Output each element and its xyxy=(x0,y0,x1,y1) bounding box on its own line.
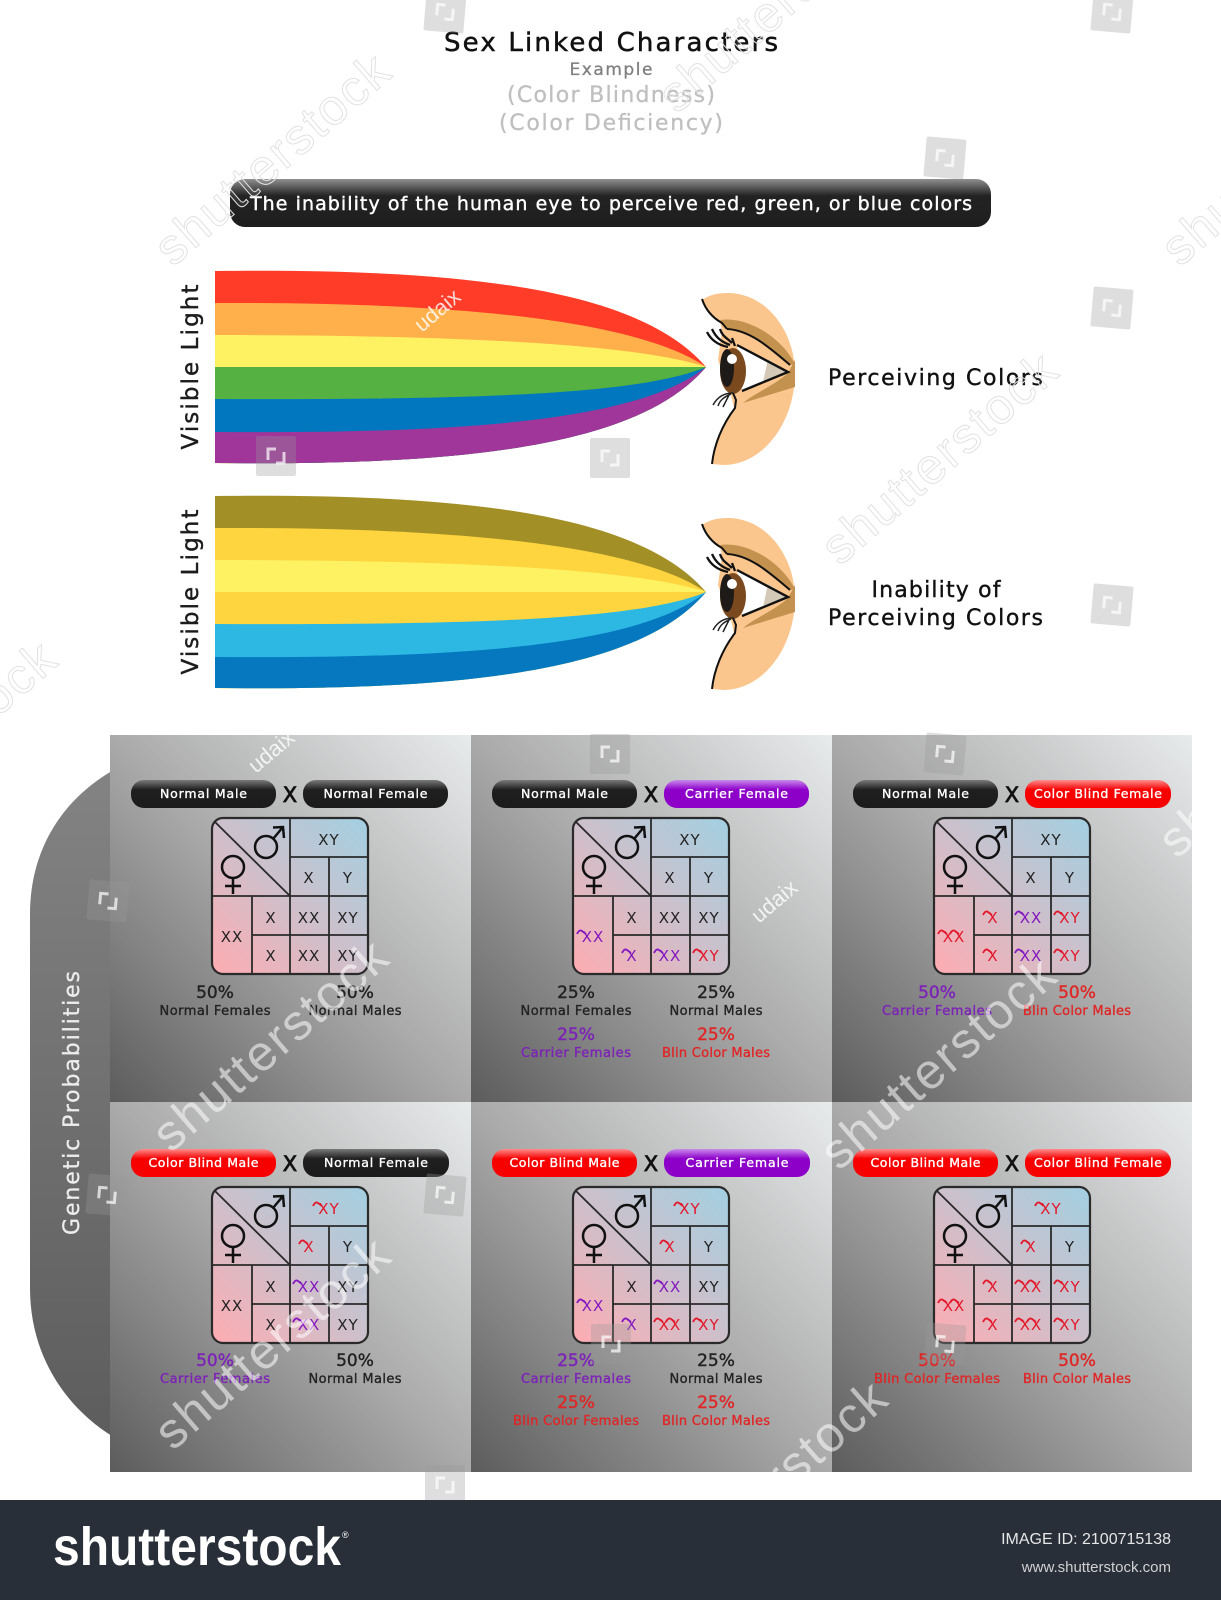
probabilities: Blin Color Males xyxy=(1023,1004,1131,1019)
punnett square: XX xyxy=(298,947,320,965)
parents pills: X xyxy=(283,1152,297,1176)
label: inability of perceiving colors: Inability of xyxy=(872,578,1002,603)
parents pills xyxy=(492,1149,810,1177)
punnett square: XY xyxy=(698,947,720,965)
punnett square: XX xyxy=(659,1278,681,1296)
watermark overlay: shutterstock xyxy=(809,946,1067,1180)
probabilities xyxy=(882,983,1131,1019)
title: Sex Linked Characters xyxy=(444,28,778,58)
punnett square: X xyxy=(987,1316,999,1334)
punnett square: XX xyxy=(1020,1278,1042,1296)
probabilities: 50% xyxy=(196,983,234,1003)
punnett square: XY xyxy=(1040,831,1062,849)
punnett square: XX xyxy=(1020,909,1042,927)
panel: color blind male x normal female xyxy=(110,1102,471,1472)
punnett square: X xyxy=(265,1316,277,1334)
side bracket: genetic probabilities xyxy=(30,771,112,1436)
parents pills xyxy=(131,780,448,808)
punnett square: XY xyxy=(337,1316,359,1334)
probabilities: Normal Males xyxy=(308,1372,402,1387)
parents pills: Color Blind Male xyxy=(870,1155,981,1170)
side bracket: genetic probabilities: Genetic Probabilities xyxy=(60,971,85,1235)
probabilities xyxy=(520,983,770,1061)
image id: IMAGE ID: 2100715138 xyxy=(1001,1531,1171,1548)
punnett square: XX xyxy=(659,1316,681,1334)
probabilities: 50% xyxy=(918,1351,956,1371)
icon: eye unable to perceive colors xyxy=(702,518,795,690)
parents pills: Normal Female xyxy=(324,786,428,801)
probabilities: Blin Color Males xyxy=(662,1414,770,1429)
punnett square: XX xyxy=(582,1297,604,1315)
probabilities: Blin Color Females xyxy=(513,1414,639,1429)
punnett square: X xyxy=(987,947,999,965)
panel: color blind male x carrier female xyxy=(471,1102,832,1472)
punnett square: XY xyxy=(318,1200,340,1218)
subtitle: color blindness: (Color Blindness) xyxy=(507,83,715,108)
punnett square: XY xyxy=(1059,1278,1081,1296)
parents pills: X xyxy=(283,783,297,807)
parents pills: Carrier Female xyxy=(686,1155,789,1170)
punnett square: X xyxy=(626,1316,638,1334)
punnett square: XX xyxy=(943,1297,965,1315)
probabilities: 25% xyxy=(697,1351,735,1371)
parents pills: Normal Male xyxy=(521,786,608,801)
probabilities: 50% xyxy=(336,983,374,1003)
punnett square: XX xyxy=(582,928,604,946)
punnett square: X xyxy=(303,869,315,887)
website: www.shutterstock.com xyxy=(1021,1559,1171,1576)
punnett square: X xyxy=(265,909,277,927)
definition bar: The inability of the human eye to perceive red, green, or blue colors xyxy=(249,193,972,215)
registered mark: ® xyxy=(342,1530,349,1540)
panel: normal male x color blind female xyxy=(832,735,1192,1102)
punnett square: XY xyxy=(1059,909,1081,927)
probabilities: 50% xyxy=(196,1351,234,1371)
probabilities: Carrier Females xyxy=(521,1046,631,1061)
footer logo: shutterstock xyxy=(53,1517,342,1577)
punnett square: XY xyxy=(337,1278,359,1296)
punnett square: X xyxy=(303,1238,315,1256)
probabilities xyxy=(513,1351,770,1429)
panel: normal male x carrier female xyxy=(471,735,832,1102)
probabilities: 25% xyxy=(557,983,595,1003)
punnett square: XY xyxy=(679,1200,701,1218)
punnett square: XY xyxy=(1059,1316,1081,1334)
probabilities: Carrier Females xyxy=(521,1372,631,1387)
probabilities xyxy=(160,983,402,1019)
label: inability of perceiving colors: Perceiving Colors xyxy=(828,606,1043,631)
punnett square xyxy=(934,818,1090,974)
punnett square xyxy=(212,1187,368,1343)
punnett square: XY xyxy=(337,947,359,965)
parents pills: Color Blind Male xyxy=(148,1155,259,1170)
watermark overlay: udaix xyxy=(409,284,465,337)
punnett square: XX xyxy=(221,1297,243,1315)
punnett square: XY xyxy=(679,831,701,849)
parents pills: Color Blind Male xyxy=(510,1155,620,1170)
probabilities: 25% xyxy=(697,983,735,1003)
label: visible light top: Visible Light xyxy=(178,284,204,450)
punnett square: X xyxy=(626,1278,638,1296)
probabilities: 50% xyxy=(336,1351,374,1371)
watermark overlay: shutterstock xyxy=(141,928,399,1162)
punnett square: XY xyxy=(1059,947,1081,965)
punnett square: X xyxy=(626,909,638,927)
parents pills: X xyxy=(1005,1152,1019,1176)
title block xyxy=(444,28,778,136)
panel: color blind male x color blind female xyxy=(832,1102,1192,1472)
subtitle: color deficiency: (Color Deficiency) xyxy=(499,111,723,136)
probabilities: 50% xyxy=(1058,983,1096,1003)
punnett square: XX xyxy=(659,947,681,965)
probabilities: Blin Color Males xyxy=(1023,1372,1131,1387)
watermark overlay: shutterstock xyxy=(640,1369,898,1600)
punnett square: XY xyxy=(1040,1200,1062,1218)
icon: eye perceiving colors xyxy=(702,293,795,465)
punnett square: XX xyxy=(298,1278,320,1296)
punnett square: X xyxy=(1025,1238,1037,1256)
punnett square: XY xyxy=(318,831,340,849)
probabilities: Carrier Females xyxy=(160,1372,270,1387)
probabilities: Normal Males xyxy=(670,1004,763,1019)
punnett square xyxy=(212,818,368,974)
parents pills: X xyxy=(1005,783,1019,807)
punnett square: X xyxy=(265,947,277,965)
punnett square: X xyxy=(664,869,676,887)
parents pills xyxy=(131,1149,449,1177)
punnett square: Y xyxy=(703,869,714,887)
watermark overlay: shutterstock xyxy=(143,42,401,276)
punnett square: X xyxy=(1025,869,1037,887)
probabilities: 25% xyxy=(697,1393,735,1413)
punnett square: XY xyxy=(698,1278,720,1296)
punnett square: X xyxy=(626,947,638,965)
parents pills xyxy=(492,780,809,808)
probabilities: Normal Females xyxy=(160,1004,271,1019)
punnett square xyxy=(573,818,729,974)
probabilities: Blin Color Males xyxy=(662,1046,770,1061)
watermark overlay: shutterstock xyxy=(143,1226,401,1460)
punnett square: XX xyxy=(1020,1316,1042,1334)
punnett square: XY xyxy=(698,909,720,927)
parents pills: Color Blind Female xyxy=(1034,786,1162,801)
watermark overlay: udaix xyxy=(746,875,802,928)
punnett square: XX xyxy=(298,909,320,927)
punnett square: XX xyxy=(1020,947,1042,965)
probabilities: 25% xyxy=(557,1351,595,1371)
probabilities: Blin Color Females xyxy=(874,1372,1000,1387)
parents pills: Normal Female xyxy=(324,1155,428,1170)
probabilities: 25% xyxy=(697,1025,735,1045)
probabilities: 25% xyxy=(557,1025,595,1045)
punnett square: Y xyxy=(703,1238,714,1256)
watermark overlay: shutterstock xyxy=(810,341,1068,575)
punnett square: X xyxy=(664,1238,676,1256)
parents pills xyxy=(853,1149,1171,1177)
punnett square: X xyxy=(265,1278,277,1296)
probabilities: 50% xyxy=(918,983,956,1003)
definition bar xyxy=(230,179,991,227)
parents pills: Normal Male xyxy=(882,786,969,801)
probabilities: Carrier Females xyxy=(882,1004,992,1019)
punnett square: X xyxy=(987,909,999,927)
label: perceiving colors: Perceiving Colors xyxy=(828,366,1043,391)
watermark overlay: udaix xyxy=(243,725,299,778)
probabilities xyxy=(160,1351,402,1387)
label: visible light bottom: Visible Light xyxy=(178,510,204,674)
punnett square: XX xyxy=(298,1316,320,1334)
parents pills xyxy=(853,780,1171,808)
parents pills: Normal Male xyxy=(160,786,247,801)
punnett square xyxy=(934,1187,1090,1343)
punnett square: XY xyxy=(337,909,359,927)
label: inability of perceiving colors xyxy=(828,578,1043,631)
punnett square: XX xyxy=(659,909,681,927)
punnett square: Y xyxy=(342,869,353,887)
parents pills: Color Blind Female xyxy=(1034,1155,1162,1170)
panel: normal male x normal female xyxy=(110,735,471,1102)
spectrum: visible light normal xyxy=(215,271,706,463)
punnett square: Y xyxy=(1064,1238,1075,1256)
punnett square: XY xyxy=(698,1316,720,1334)
probabilities: 25% xyxy=(557,1393,595,1413)
probabilities: Normal Females xyxy=(520,1004,632,1019)
probabilities: Normal Males xyxy=(308,1004,402,1019)
punnett square: X xyxy=(987,1278,999,1296)
punnett square xyxy=(573,1187,729,1343)
parents pills: X xyxy=(644,1152,658,1176)
punnett square: Y xyxy=(1064,869,1075,887)
probabilities: Normal Males xyxy=(670,1372,763,1387)
punnett square: XX xyxy=(221,928,243,946)
punnett square: XX xyxy=(943,928,965,946)
subtitle: example: Example xyxy=(570,60,652,80)
probabilities xyxy=(874,1351,1131,1387)
punnett square: Y xyxy=(342,1238,353,1256)
footer bar xyxy=(0,1500,1221,1600)
probabilities: 50% xyxy=(1058,1351,1096,1371)
spectrum: visible light deficient xyxy=(215,496,706,688)
parents pills: Carrier Female xyxy=(685,786,788,801)
parents pills: X xyxy=(644,783,658,807)
